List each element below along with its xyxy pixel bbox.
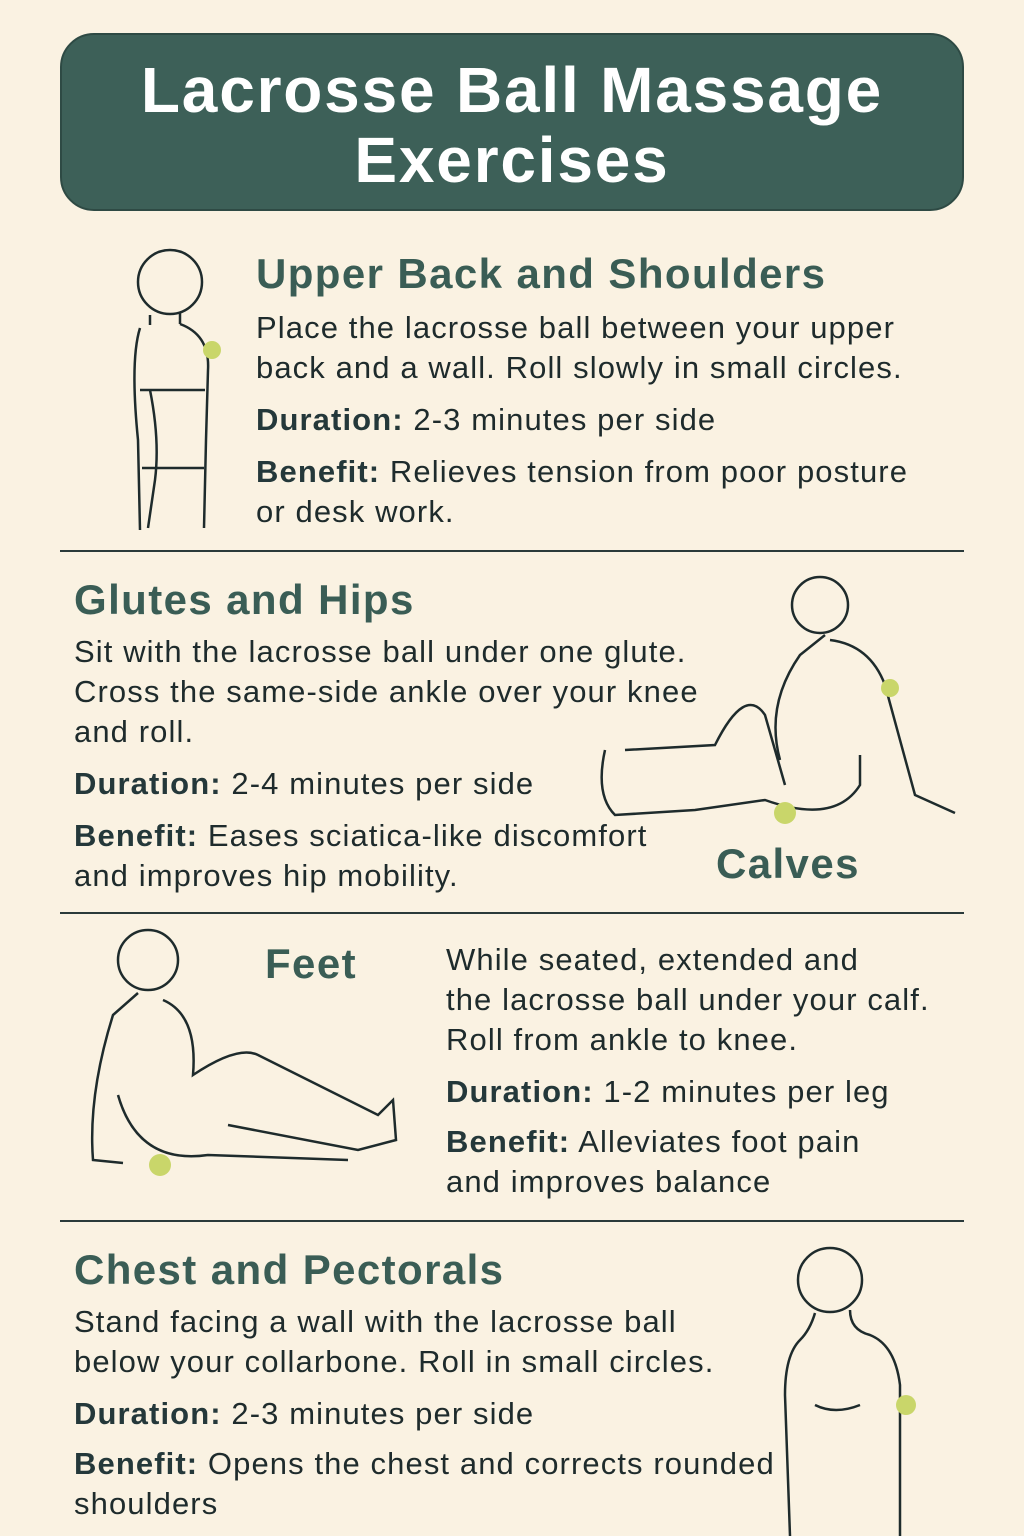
figure: upper back standing bbox=[133, 248, 221, 530]
section: upper back: or desk work. bbox=[256, 494, 455, 529]
section: upper back: Benefit: Relieves tension from poor posture bbox=[256, 454, 908, 489]
title: Lacrosse Ball Massage bbox=[141, 54, 883, 126]
section: upper back: Upper Back and Shoulders bbox=[256, 250, 826, 297]
section: calves text: Roll from ankle to knee. bbox=[446, 1022, 798, 1057]
section: chest: Benefit: Opens the chest and corrects rounded bbox=[74, 1446, 775, 1481]
section: glutes: Cross the same-side ankle over your knee bbox=[74, 674, 699, 709]
section: chest: shoulders bbox=[74, 1486, 218, 1521]
section: glutes: Duration: 2-4 minutes per side bbox=[74, 766, 534, 801]
section: glutes bbox=[74, 576, 699, 893]
section: upper back: Place the lacrosse ball between your upper bbox=[256, 310, 895, 345]
section: calves text: While seated, extended and bbox=[446, 942, 859, 977]
section: glutes: Benefit: Eases sciatica-like discomfort bbox=[74, 818, 647, 853]
section: upper back: back and a wall. Roll slowly in small circles. bbox=[256, 350, 903, 385]
section: glutes: and improves hip mobility. bbox=[74, 858, 459, 893]
section: chest: Chest and Pectorals bbox=[74, 1246, 504, 1293]
section: calves text: Duration: 1-2 minutes per leg bbox=[446, 1074, 890, 1109]
section: calves text: the lacrosse ball under your calf. bbox=[446, 982, 930, 1017]
section: upper back bbox=[256, 250, 908, 529]
title bbox=[60, 33, 964, 211]
section: calves text: and improves balance bbox=[446, 1164, 771, 1199]
heading: calves: Calves bbox=[716, 840, 860, 887]
section: calves text bbox=[446, 942, 930, 1199]
section: chest bbox=[74, 1246, 775, 1521]
heading: feet: Feet bbox=[265, 940, 357, 987]
section: calves text: Benefit: Alleviates foot pain bbox=[446, 1124, 860, 1159]
figure: standing chest bbox=[784, 1246, 916, 1536]
title: Exercises bbox=[354, 124, 670, 196]
figure: seated glute bbox=[600, 576, 956, 824]
section: glutes: and roll. bbox=[74, 714, 194, 749]
section: glutes: Sit with the lacrosse ball under one glute. bbox=[74, 634, 687, 669]
section: chest: below your collarbone. Roll in small circles. bbox=[74, 1344, 714, 1379]
section: glutes: Glutes and Hips bbox=[74, 576, 415, 623]
section: upper back: Duration: 2-3 minutes per side bbox=[256, 402, 716, 437]
section: chest: Duration: 2-3 minutes per side bbox=[74, 1396, 534, 1431]
figure: seated feet bbox=[90, 928, 398, 1176]
section: chest: Stand facing a wall with the lacrosse ball bbox=[74, 1304, 677, 1339]
